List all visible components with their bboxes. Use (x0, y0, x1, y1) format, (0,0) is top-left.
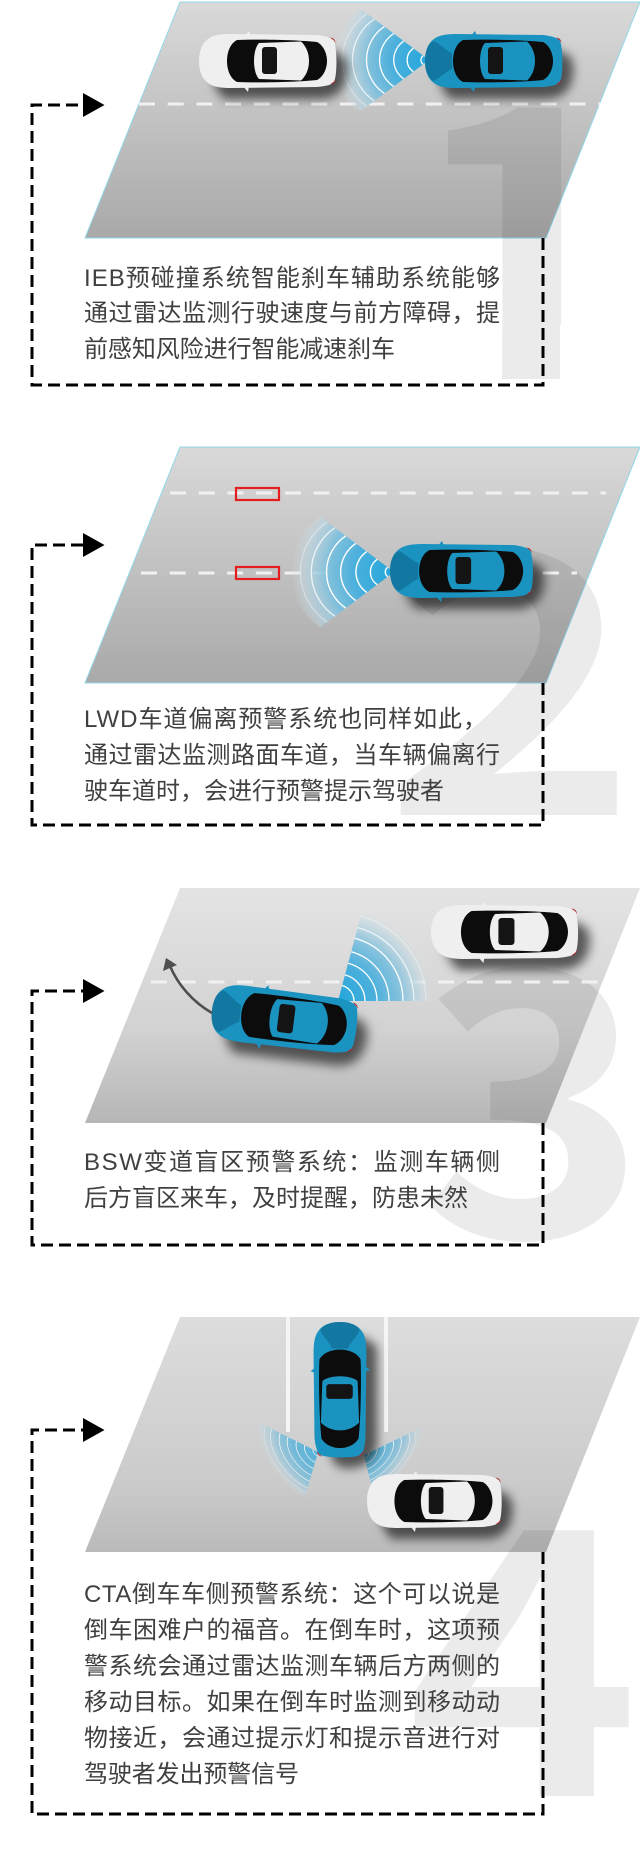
description 2: 驶车道时，会进行预警提示驾驶者 (84, 778, 444, 805)
description 4: 倒车困难户的福音。在倒车时，这项预 (84, 1617, 500, 1644)
section 2: LWD (32, 404, 640, 918)
road panel 1 (85, 2, 640, 238)
lane line 3 (151, 980, 602, 984)
description 3 (84, 1149, 500, 1212)
blue car 2 (390, 541, 544, 609)
description 2: LWD车道偏离预警系统也同样如此， (84, 706, 487, 733)
radar wedge 4 right (341, 1422, 433, 1496)
dashed frame 1 (32, 105, 543, 385)
white car 3 (431, 902, 590, 970)
arrow 3 (83, 979, 104, 1003)
lane change arrow (163, 958, 212, 1013)
description 4: 警系统会通过雷达监测车辆后方两侧的 (84, 1653, 500, 1680)
description 3: BSW变道盲区预警系统：监测车辆侧 (84, 1149, 500, 1176)
description 2: 通过雷达监测路面车道，当车辆偏离行 (84, 742, 500, 769)
description 1: IEB预碰撞系统智能刹车辅助系统能够 (84, 265, 500, 292)
arrow 4 (83, 1418, 104, 1442)
section 4: CTA (32, 1317, 640, 1861)
description 4: 物接近，会通过提示灯和提示音进行对 (84, 1725, 500, 1752)
blue car 3 (207, 979, 372, 1069)
dashed frame 3 (32, 991, 543, 1245)
arrow 1 (83, 93, 104, 117)
section 1: IEB (30, 2, 640, 386)
parking lines (288, 1317, 386, 1432)
section 3: BSW (32, 822, 640, 1341)
white car 4 (367, 1471, 513, 1539)
lane line 1 (139, 102, 600, 106)
road panel 3 (85, 888, 640, 1123)
arrow 2 (83, 533, 104, 557)
large number 3: 3 (420, 822, 640, 1341)
description 1: 前感知风险进行智能减速刹车 (84, 336, 395, 363)
description 4 (84, 1581, 500, 1788)
white car 1 (199, 31, 347, 99)
description 4: CTA倒车车侧预警系统：这个可以说是 (84, 1581, 500, 1608)
description 2 (84, 706, 500, 805)
description 3: 后方盲区来车，及时提醒，防患未然 (84, 1185, 468, 1212)
large number 2: 2 (382, 404, 639, 918)
road panel 2 (85, 447, 640, 683)
radar wedge 2 (291, 517, 394, 627)
red highlight boxes (236, 488, 279, 579)
description 1: 通过雷达监测行驶速度与前方障碍，提 (84, 300, 500, 327)
dashed frame 4 (32, 1430, 543, 1814)
blue car 1 (425, 31, 573, 99)
description 4: 移动目标。如果在倒车时监测到移动动 (84, 1689, 500, 1716)
radar wedge 3 (338, 909, 433, 1001)
description 4: 驾驶者发出预警信号 (84, 1761, 299, 1788)
dashed frame 2 (32, 545, 543, 825)
blue car 4 (311, 1322, 377, 1468)
radar wedge 1 (333, 9, 429, 111)
radar wedge 4 left (246, 1415, 341, 1500)
lane lines 2 (141, 493, 606, 573)
description 1 (84, 265, 500, 363)
road panel 4 (85, 1317, 640, 1552)
